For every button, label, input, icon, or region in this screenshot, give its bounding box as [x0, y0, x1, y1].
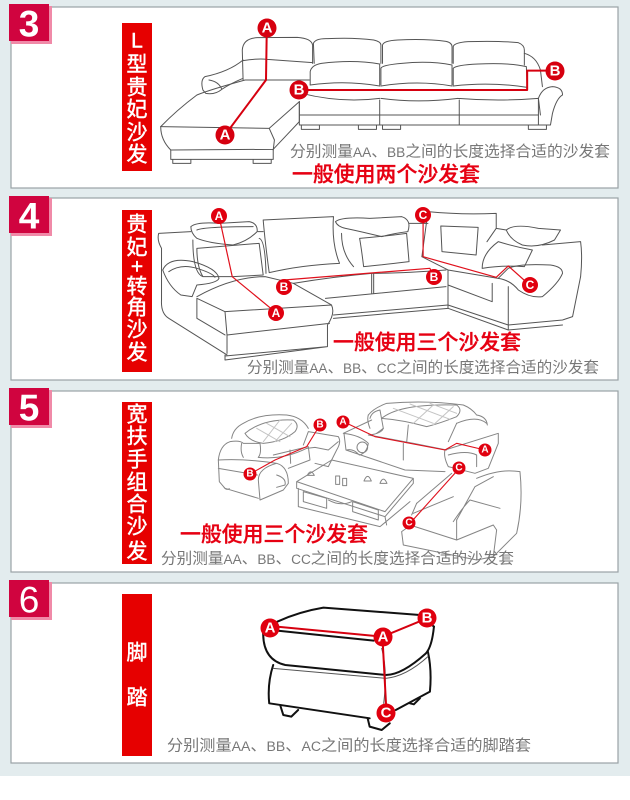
- vertical title: 宽扶手组合沙发: 宽: [126, 404, 148, 426]
- marker C: [522, 277, 538, 293]
- caption: 分别测量AA、BB、CC之间的长度选择合适的沙发套: [161, 550, 514, 568]
- red note: 一般使用两个沙发套: [292, 164, 480, 186]
- caption: 分别测量AA、BB、CC之间的长度选择合适的沙发套: [247, 358, 599, 376]
- panel 4 frame: [11, 198, 618, 380]
- red note: 一般使用三个沙发套: [333, 332, 521, 354]
- vertical title: 贵妃+转角沙发: 妃: [126, 236, 148, 260]
- vertical title: 脚踏: 踏: [126, 686, 148, 710]
- vertical title: L型贵妃沙发: [122, 23, 152, 171]
- badge 5: [9, 388, 52, 428]
- vertical title: L型贵妃沙发: L: [131, 30, 143, 52]
- marker C: [376, 704, 396, 722]
- badge 3: [9, 4, 52, 44]
- vertical title: L型贵妃沙发: 发: [126, 144, 148, 166]
- footstool line drawing: [263, 608, 434, 730]
- vertical title: 贵妃+转角沙发: 发: [126, 342, 148, 364]
- red note: 一般使用三个沙发套: [180, 524, 368, 546]
- measuring lines AA, AB, AC: [270, 618, 427, 714]
- sofa line drawing: L-shaped: [161, 37, 563, 163]
- measuring lines AA and BB: [225, 28, 554, 135]
- vertical title: 脚踏: [122, 594, 152, 756]
- vertical title: 贵妃+转角沙发: +: [131, 256, 143, 278]
- marker A: A: [339, 416, 347, 428]
- marker A: A: [265, 620, 276, 636]
- vertical title: 贵妃+转角沙发: 角: [126, 296, 148, 320]
- panel: L-shaped sofa (3): [9, 4, 618, 188]
- vertical title: 贵妃+转角沙发: [122, 210, 152, 372]
- marker A: A: [378, 628, 389, 646]
- vertical title: 贵妃+转角沙发: 转: [126, 276, 148, 298]
- vertical title: 宽扶手组合沙发: 扶: [126, 426, 148, 448]
- marker A: A: [215, 209, 224, 223]
- marker A: [258, 18, 276, 38]
- marker B: [276, 279, 292, 295]
- vertical title: 脚踏: 脚: [126, 642, 148, 664]
- panel 3 frame: [11, 7, 618, 188]
- panel 6 frame: [11, 583, 618, 763]
- badge 4: 4: [19, 196, 40, 236]
- marker A: [374, 628, 392, 646]
- panel 5 frame: [11, 391, 618, 572]
- marker C: [402, 516, 416, 530]
- measuring lines AA, BB, CC: [219, 215, 530, 313]
- sofa line drawing: chaise and corner: [158, 212, 582, 360]
- vertical title: L型贵妃沙发: 沙: [126, 122, 148, 144]
- marker A: [336, 416, 350, 428]
- panel: chaise + corner sofa (4): [9, 196, 618, 380]
- badge 5: 5: [19, 388, 39, 428]
- marker B: [314, 418, 326, 432]
- badge 6: 6: [19, 580, 39, 620]
- caption: 分别测量AA、BB、AC之间的长度选择合适的脚踏套: [167, 736, 531, 754]
- marker B: B: [280, 280, 289, 294]
- marker A: [478, 444, 492, 456]
- vertical title: 宽扶手组合沙发: 组: [126, 472, 148, 494]
- marker C: [452, 462, 466, 474]
- vertical title: L型贵妃沙发: 型: [126, 54, 148, 76]
- marker B: [426, 269, 442, 285]
- marker C: [415, 207, 431, 223]
- vertical title: L型贵妃沙发: 贵: [126, 76, 148, 100]
- vertical title: 宽扶手组合沙发: 合: [126, 494, 148, 516]
- badge 3: 3: [19, 4, 39, 44]
- measuring lines AA, BB, CC: [250, 422, 485, 523]
- marker B: [244, 468, 256, 480]
- sofa set line drawing: [218, 402, 521, 560]
- marker B: B: [422, 610, 433, 626]
- marker A: [216, 126, 234, 144]
- marker C: C: [526, 278, 535, 292]
- marker A: A: [220, 126, 231, 144]
- panel: wide-arm set sofa (5): [9, 388, 618, 572]
- marker B: B: [550, 62, 561, 80]
- marker B: [418, 608, 436, 628]
- marker A: [268, 305, 284, 321]
- panel: footstool (6): [9, 580, 618, 763]
- footstool inner seam lines: [273, 648, 428, 703]
- vertical title: 贵妃+转角沙发: 贵: [126, 214, 148, 236]
- marker A: A: [262, 20, 273, 36]
- vertical title: 贵妃+转角沙发: 沙: [126, 318, 148, 342]
- vertical title: 宽扶手组合沙发: [122, 402, 152, 564]
- vertical title: 宽扶手组合沙发: 发: [126, 540, 148, 564]
- marker A: A: [272, 306, 281, 320]
- marker B: B: [246, 468, 254, 480]
- marker C: C: [419, 208, 428, 222]
- marker B: [546, 62, 564, 80]
- marker B: [290, 80, 308, 100]
- marker B: B: [430, 270, 439, 284]
- marker B: B: [316, 420, 324, 430]
- vertical title: L型贵妃沙发: 妃: [126, 98, 148, 122]
- vertical title: 宽扶手组合沙发: 沙: [126, 516, 148, 538]
- marker A: [211, 208, 227, 224]
- marker C: C: [455, 462, 463, 474]
- badge 6: [9, 580, 52, 620]
- marker C: C: [381, 704, 392, 722]
- marker C: C: [405, 518, 413, 528]
- marker B: B: [294, 82, 305, 98]
- marker A: [260, 618, 280, 638]
- vertical title: 宽扶手组合沙发: 手: [126, 448, 148, 472]
- badge 4: [9, 196, 52, 236]
- marker A: A: [481, 444, 489, 456]
- caption: 分别测量AA、BB之间的长度选择合适的沙发套: [290, 142, 610, 160]
